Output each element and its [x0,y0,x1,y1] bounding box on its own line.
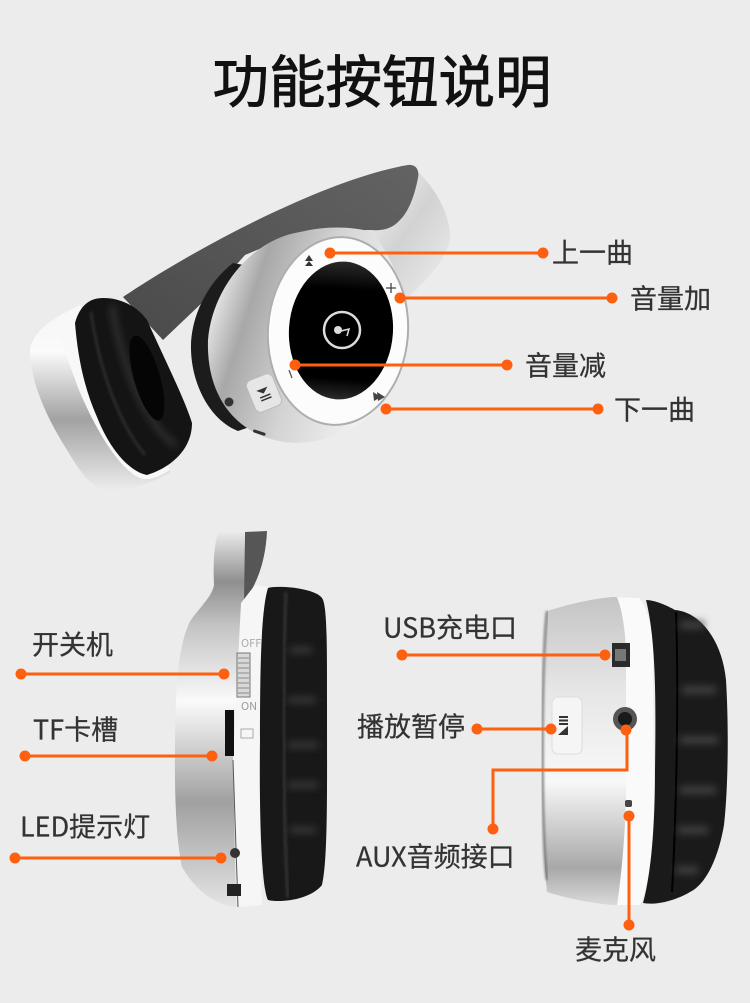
headphones: three-quarter view [30,165,450,490]
callout: LED提示灯 [10,806,226,864]
cup body [175,533,245,907]
headphones: left side view [175,531,327,907]
ring marks [305,255,313,266]
callout: 音量加 [394,278,711,316]
power slider [237,653,250,697]
callout: TF卡槽 [20,708,218,762]
callout: USB充电口 [383,606,610,660]
callout: 麦克风: 麦克风 [575,928,656,968]
logo [324,312,360,348]
tf slot [225,710,234,756]
white rim [617,597,654,905]
callout: USB充电口: USB充电口 [383,606,517,646]
callout: AUX音频接口: AUX音频接口 [356,836,515,874]
side plate [233,585,268,907]
led [230,848,240,858]
callout: TF卡槽: TF卡槽 [33,708,118,748]
callout: 音量加: 音量加 [630,278,711,316]
right ear cup back pad [191,263,270,431]
callout: 音量减: 音量减 [525,344,606,384]
microphone hole [625,800,632,807]
callout: 播放暂停 [357,706,556,744]
callout: 下一曲 [380,388,695,428]
play pause button [552,697,582,754]
aux jack [613,707,637,731]
callout: 开关机 [16,624,230,680]
callout: 上一曲 [324,232,633,270]
ear pad [643,600,728,904]
tf icon [241,729,253,738]
callout: LED提示灯: LED提示灯 [20,806,150,844]
jack and mic [224,398,234,406]
left ear cup body [30,305,170,490]
headband [123,165,450,340]
callout: AUX音频接口 [356,724,632,874]
black touch panel [284,258,398,403]
ear pad [260,587,327,901]
play pause button [245,372,283,414]
band stub [243,531,267,602]
off label: OFF [241,635,261,651]
left cup white band [57,305,170,479]
cup body [543,597,654,905]
left ear pad [75,298,192,475]
callout: 播放暂停: 播放暂停 [357,706,465,744]
control ring [261,231,415,431]
title: 功能按钮说明 [212,37,552,119]
on label: ON [241,698,257,714]
right ear cup body [208,228,408,443]
callout: 上一曲: 上一曲 [552,232,633,270]
usb port [227,884,241,896]
usb port [612,643,630,667]
callout: 下一曲: 下一曲 [614,388,695,428]
callout: 音量减 [290,344,606,384]
callout: 开关机: 开关机 [32,624,113,662]
callout: 麦克风 [575,810,656,968]
headphones: right side view [542,597,728,905]
